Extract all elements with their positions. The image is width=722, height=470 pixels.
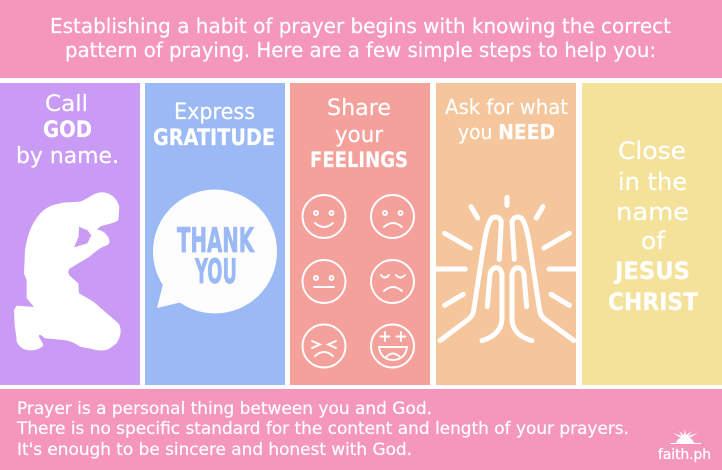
panel: close in Jesus' name: Close	[618, 137, 686, 165]
panel: express gratitude: Express	[174, 100, 255, 125]
panel: share feelings: Share	[327, 96, 391, 121]
top banner: Establishing a habit of prayer begins with knowing the correct	[50, 14, 671, 38]
panel: close in Jesus' name: of	[641, 227, 666, 255]
panel: express gratitude: GRATITUDE	[153, 126, 275, 151]
panel: call God: Call	[45, 92, 88, 117]
top banner: pattern of praying. Here are a few simple steps to help you:	[65, 38, 656, 62]
icon: thank you speech bubble: YOU	[194, 252, 237, 292]
panel: ask for what you need: you NEED	[458, 120, 555, 144]
bottom banner: Prayer is a personal thing between you and God.	[17, 399, 432, 418]
panel: share feelings: your	[335, 123, 384, 148]
panel: call God: GOD	[43, 118, 92, 143]
icons: six emotion faces	[302, 195, 414, 368]
panel: call God	[0, 83, 140, 385]
panel: close in Jesus' name: name	[616, 198, 689, 226]
logo: faith.ph: faith.ph	[658, 447, 711, 463]
panel: ask for what you need	[436, 83, 576, 385]
panel: close in Jesus' name: in the	[618, 168, 687, 196]
panel: express gratitude	[145, 83, 285, 385]
panel: ask for what you need: Ask for what	[445, 95, 568, 119]
panel: call God: by name.	[16, 144, 119, 169]
bottom banner: It's enough to be sincere and honest with God.	[17, 440, 412, 459]
bottom banner	[0, 389, 722, 470]
icon: thank you speech bubble: THANK	[177, 221, 255, 261]
top banner	[0, 0, 722, 78]
icon: kneeling person	[14, 192, 121, 351]
panel: close in Jesus' name: JESUS	[613, 257, 690, 285]
icon: praying hands	[436, 197, 576, 341]
panel: close in Jesus' name: CHRIST	[608, 288, 699, 316]
icon: thank you speech bubble	[153, 190, 277, 314]
logo: faith.ph	[658, 429, 711, 463]
panel: close in Jesus' name	[582, 83, 722, 385]
panel: share feelings	[290, 83, 430, 385]
bottom banner: There is no specific standard for the content and length of your prayers.	[16, 419, 629, 438]
panel: share feelings: FEELINGS	[310, 148, 408, 172]
